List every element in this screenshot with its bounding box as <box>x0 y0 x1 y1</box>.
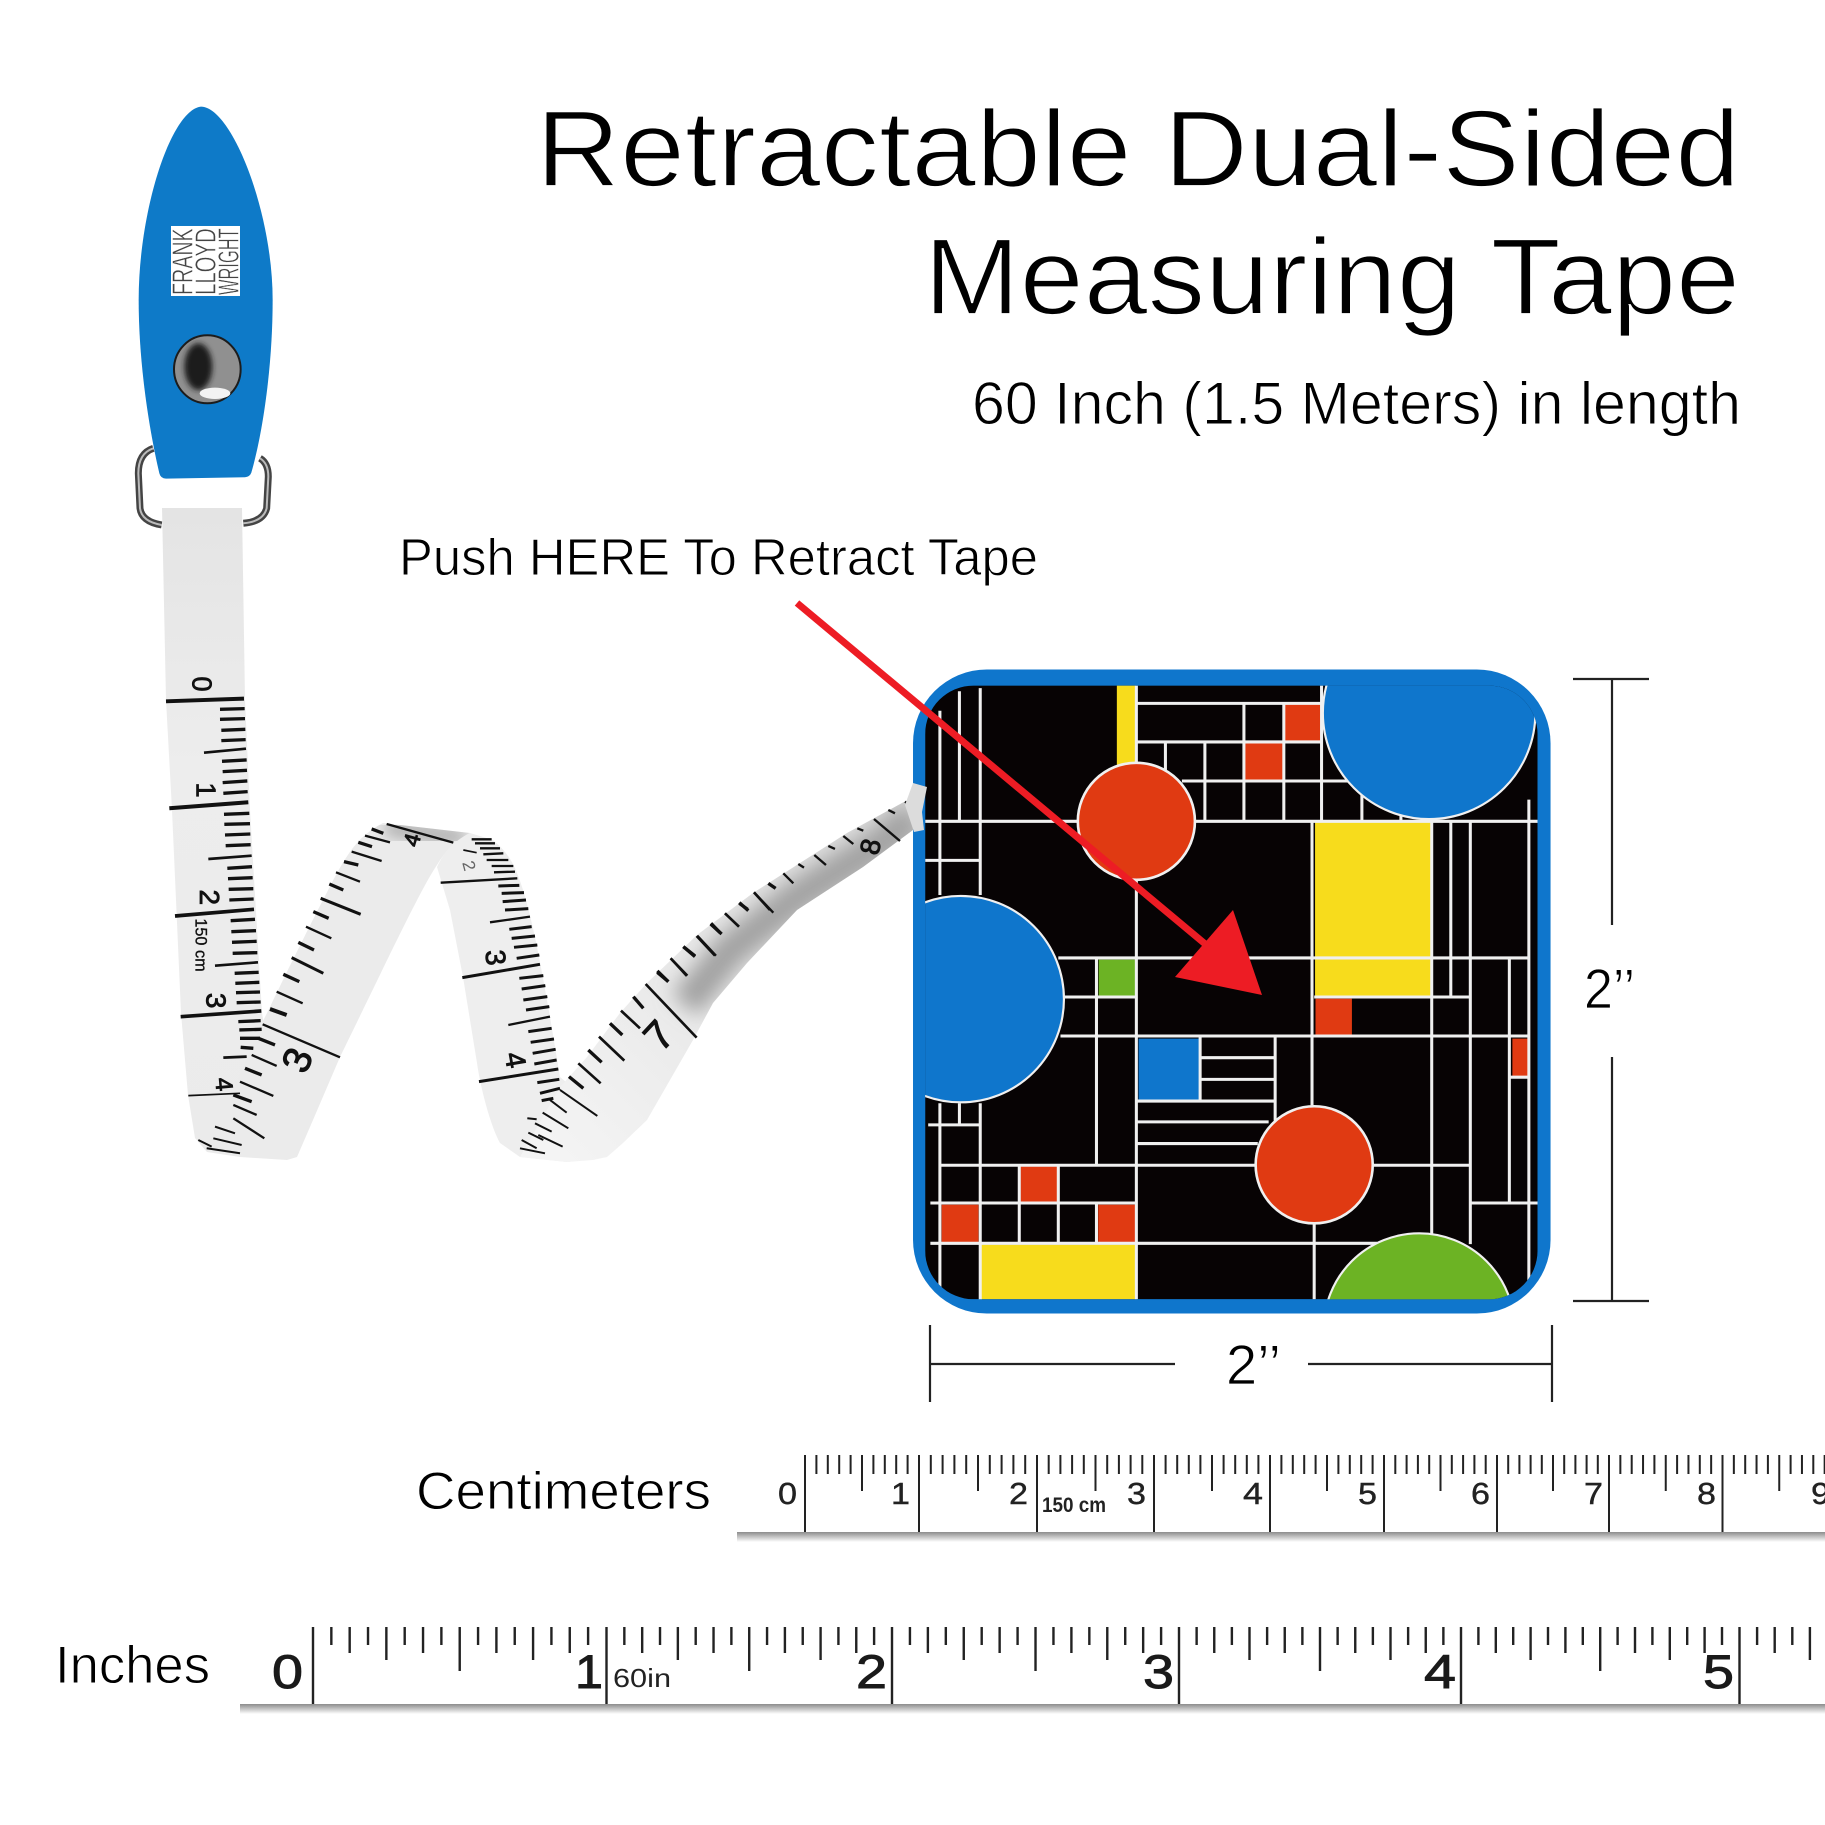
logo: FRANK <box>168 228 200 295</box>
ruler: centimeters: 8 <box>1697 1476 1716 1511</box>
icon: D-ring <box>138 448 268 525</box>
dimension: height <box>1573 679 1649 1301</box>
hanging strip and rising band ticks: 3 <box>273 1042 322 1079</box>
title: Retractable Dual-Sided <box>536 88 1740 210</box>
tape segment: hanging strip <box>162 508 270 1152</box>
callout: push here to retract tape: Push HERE To Retract Tape <box>399 529 1038 587</box>
hanging strip and rising band ticks: 4 <box>398 831 426 849</box>
title: Measuring Tape <box>924 216 1740 338</box>
tape segment: rising band <box>207 823 470 1160</box>
arrow: red pointer <box>797 603 1262 995</box>
subtitle: 60 Inch (1.5 Meters) in length <box>972 370 1741 437</box>
tape shading <box>385 815 915 1005</box>
hanging strip and rising band ticks: 3 <box>201 993 232 1008</box>
logo: WRIGHT <box>213 228 245 295</box>
label: centimeters: Centimeters <box>416 1462 711 1521</box>
far band ticks: 7 <box>634 1011 683 1059</box>
far band ticks <box>634 802 912 1059</box>
dimension: height: 2’’ <box>1584 957 1635 1020</box>
label: inches: Inches <box>55 1636 210 1695</box>
ruler: inches: 3 <box>1143 1645 1174 1698</box>
logo: LLOYD <box>190 228 222 295</box>
logo <box>168 226 245 296</box>
tape segment: descending band <box>437 833 607 1162</box>
hanging strip and rising band ticks: 4 <box>209 1076 237 1092</box>
key fob <box>139 107 273 479</box>
ruler: centimeters: 5 <box>1358 1476 1377 1511</box>
ruler: centimeters: 1 <box>891 1476 910 1511</box>
dimension: width: 2’’ <box>1226 1333 1281 1396</box>
hanging strip ticks upper: 1 <box>191 782 222 798</box>
ruler: centimeters: 0 <box>778 1476 797 1511</box>
measuring tape strip <box>162 508 927 1162</box>
hanging strip ticks upper: 0 <box>187 676 218 692</box>
descending and rising band ticks <box>441 839 770 1153</box>
ruler: centimeters: 6 <box>1471 1476 1490 1511</box>
title <box>536 88 1740 338</box>
ruler: inches: 5 <box>1703 1645 1734 1698</box>
ruler: centimeters: 7 <box>1584 1476 1603 1511</box>
dimension: width <box>930 1325 1552 1402</box>
fob body <box>139 107 273 479</box>
tape case <box>913 670 1551 1314</box>
ruler: centimeters <box>737 1455 1825 1542</box>
hanging strip and rising band ticks <box>175 813 453 1153</box>
ruler: inches: 1 <box>575 1645 603 1698</box>
tape segment: band into case <box>520 783 927 1162</box>
ruler: centimeters: 2 <box>1009 1476 1028 1511</box>
hanging strip and rising band ticks: 150 cm <box>191 918 210 972</box>
case frame <box>913 670 1551 1314</box>
ruler: centimeters: 4 <box>1243 1476 1263 1511</box>
ruler: inches: 2 <box>856 1645 887 1698</box>
hanging strip and rising band ticks: 2 <box>194 890 225 905</box>
ruler: inches: 4 <box>1424 1645 1456 1698</box>
ruler: inches: 0 <box>272 1645 303 1698</box>
tape exit tip <box>905 783 927 832</box>
descending and rising band ticks: 2 <box>458 859 480 873</box>
case face pattern <box>925 686 1538 1300</box>
ruler: inches <box>240 1627 1825 1714</box>
ruler: centimeters: 3 <box>1127 1476 1146 1511</box>
far band ticks: 8 <box>854 836 887 857</box>
ruler: inches: 60in <box>613 1663 671 1693</box>
descending and rising band ticks: 3 <box>479 948 512 967</box>
ruler: centimeters: 150 cm <box>1042 1494 1106 1517</box>
icon: rivet <box>174 335 241 403</box>
descending and rising band ticks: 4 <box>499 1050 532 1070</box>
hanging strip ticks upper <box>166 676 248 808</box>
